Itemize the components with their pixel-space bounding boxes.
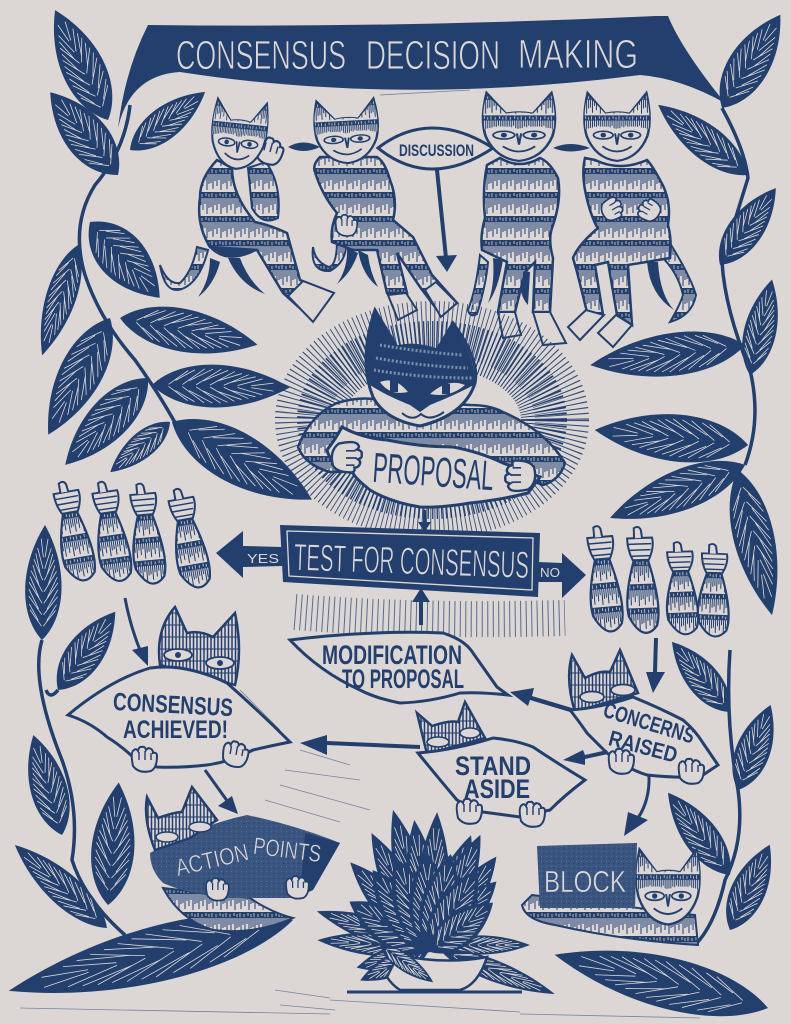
discussion speech leaf bbox=[378, 128, 493, 169]
arrow: no hands to concerns bbox=[646, 638, 665, 693]
title: DECISION bbox=[366, 32, 500, 78]
consensus achieved leaf bbox=[68, 667, 290, 772]
discussion label: DISCUSSION bbox=[399, 141, 474, 160]
arrow: consensus to action points bbox=[205, 770, 238, 814]
proposal cat body and arms bbox=[298, 399, 565, 485]
modification label: MODIFICATION bbox=[322, 640, 462, 670]
cat body bbox=[163, 888, 293, 931]
right hand bbox=[221, 740, 250, 769]
left thumbs up group bbox=[50, 479, 213, 590]
leaves: upper right bbox=[588, 4, 791, 620]
block label: BLOCK bbox=[544, 864, 626, 899]
no label: NO bbox=[540, 566, 560, 580]
arrow: concerns to block bbox=[624, 775, 649, 836]
cat 4: seated, hands in lap bbox=[568, 93, 696, 347]
right hand bbox=[679, 759, 704, 784]
left hand bbox=[132, 747, 157, 772]
right hand bbox=[286, 876, 309, 899]
cat 3: seated, arms crossed bbox=[468, 93, 566, 345]
arrow: yes hands to consensus bbox=[125, 598, 148, 666]
left hand bbox=[609, 749, 634, 774]
leaves: lower right bbox=[548, 632, 787, 1024]
stand aside leaf bbox=[418, 738, 585, 827]
consensus cat head bbox=[159, 607, 239, 685]
right hand bbox=[505, 461, 535, 491]
concerns raised leaf: RAISED bbox=[606, 725, 680, 768]
left hand bbox=[332, 442, 362, 472]
right mixed hands group bbox=[584, 525, 731, 637]
stand aside cat head bbox=[417, 702, 485, 754]
yes arrow bbox=[216, 531, 282, 578]
concerns label: CONCERNS bbox=[601, 697, 698, 749]
overhanging plant leaf bbox=[375, 938, 438, 989]
test for consensus box bbox=[280, 525, 540, 597]
cat 2: seated, listening bbox=[313, 98, 457, 320]
left hand bbox=[457, 799, 482, 824]
title bbox=[176, 31, 638, 78]
test label: TEST FOR CONSENSUS bbox=[293, 537, 530, 587]
plant leaves bbox=[313, 806, 559, 1004]
title: CONSENSUS bbox=[176, 32, 346, 78]
proposal cat eyes bbox=[380, 380, 465, 395]
arrow: concerns to stand aside bbox=[563, 750, 608, 765]
proposal cat bbox=[298, 310, 565, 485]
consensus achieved leaf: ACHIEVED! bbox=[123, 716, 228, 744]
speech leaf: cat 1 to cat 2 bbox=[288, 142, 320, 151]
plant pot bbox=[387, 955, 487, 990]
title banner bbox=[118, 16, 725, 128]
arrow: discussion to proposal bbox=[435, 170, 457, 272]
rays around proposal cat bbox=[302, 328, 562, 512]
cat head bbox=[146, 787, 217, 850]
stand aside label: STAND bbox=[455, 751, 531, 781]
arrow: concerns to modification bbox=[510, 688, 572, 712]
action points label bbox=[173, 833, 323, 882]
left hand bbox=[206, 878, 229, 901]
arrow: stand aside to consensus bbox=[300, 735, 420, 755]
leaves: lower left bbox=[2, 525, 300, 1018]
right hand bbox=[520, 802, 545, 827]
title: MAKING bbox=[518, 31, 638, 77]
hatching below test box bbox=[295, 612, 565, 619]
yes label: YES bbox=[247, 552, 279, 566]
concerns cat head bbox=[569, 650, 638, 712]
leaves: upper left bbox=[28, 1, 324, 522]
action points label: ACTION bbox=[173, 839, 251, 882]
speech leaf: cat 3 to cat 4 bbox=[553, 144, 590, 152]
proposal label: PROPOSAL bbox=[371, 444, 495, 499]
stand aside leaf: ASIDE bbox=[464, 774, 530, 804]
block cat bbox=[522, 843, 700, 945]
stems: upper left vine bbox=[79, 105, 178, 428]
proposal cat mouth bbox=[402, 412, 444, 418]
action points cat bbox=[146, 787, 340, 931]
concerns raised leaf bbox=[570, 697, 718, 784]
stems: upper right vine bbox=[722, 108, 755, 465]
ground line bbox=[347, 990, 522, 994]
stems: lower left vine bbox=[39, 640, 125, 935]
potted plant bbox=[313, 806, 559, 1004]
stems: lower right vine bbox=[695, 650, 740, 945]
no arrow bbox=[538, 553, 586, 598]
modification leaf bbox=[290, 632, 508, 703]
cat 1: seated, hand to ear bbox=[160, 98, 334, 322]
arrow: modification up to test bbox=[412, 588, 430, 625]
modification leaf: TO PROPOSAL bbox=[342, 664, 464, 694]
carved background marks bbox=[20, 90, 700, 1018]
action points sign bbox=[150, 815, 340, 898]
consensus label: CONSENSUS bbox=[112, 688, 234, 722]
proposal leaf bbox=[327, 427, 540, 507]
block sign bbox=[537, 843, 637, 908]
proposal cat head bbox=[366, 310, 476, 426]
action points label: POINTS bbox=[252, 833, 323, 868]
arrow: proposal to test bbox=[418, 510, 431, 532]
